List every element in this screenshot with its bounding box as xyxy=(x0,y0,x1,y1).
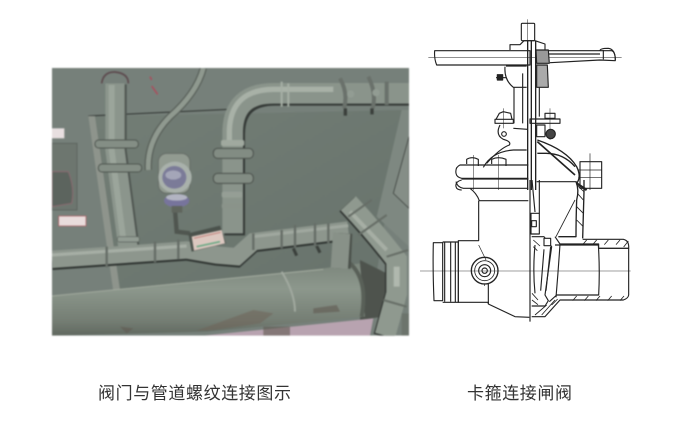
upper valve drawing: handwheel, stem and bonnet xyxy=(428,19,622,190)
transmitter instrument xyxy=(158,153,192,233)
figure: threaded valve and pipe photo xyxy=(51,67,410,337)
right fittings and riser xyxy=(339,200,408,337)
flow meter box with label xyxy=(188,226,226,252)
left vertical pipe xyxy=(95,72,142,251)
lower valve drawing: body with clamp ends xyxy=(420,180,631,322)
upper right elbow pipe xyxy=(213,77,411,235)
big lower pipe xyxy=(52,260,387,336)
conduit cable xyxy=(148,68,203,170)
caption: clamp gate valve: 卡箍连接闸阀 xyxy=(467,384,573,403)
caption: threaded connection: 阀门与管道螺纹连接图示 xyxy=(98,384,292,403)
horizontal middle pipe xyxy=(52,223,348,267)
photo background wall xyxy=(52,68,409,336)
